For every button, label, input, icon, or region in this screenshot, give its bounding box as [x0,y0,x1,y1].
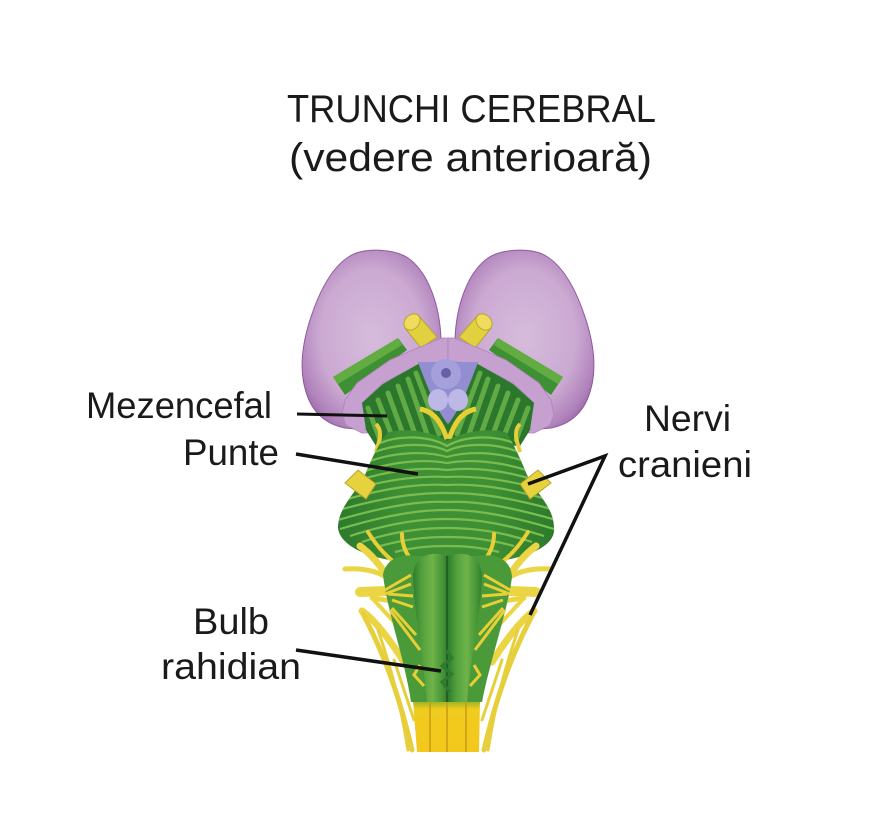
title [287,88,656,180]
midbrain (mesencephalon) [362,359,534,452]
title: TRUNCHI CEREBRAL [287,88,656,131]
thalamus lobes and optic structures [302,250,594,433]
label: Bulb rahidian [161,601,441,687]
label: Punte [183,432,418,474]
pons [338,430,556,560]
label: Mezencefal: Mezencefal [86,385,272,426]
label: Nervi cranieni: cranieni [618,444,752,485]
cranial nerves [345,470,551,750]
spinal cord [413,700,480,752]
label: Bulb rahidian: Bulb [193,601,269,642]
illustration: brainstem anterior view [302,250,594,752]
label: Bulb rahidian: rahidian [161,646,301,687]
label: Punte: Punte [183,432,279,473]
label: Nervi cranieni [528,398,752,615]
medulla oblongata [383,554,512,752]
label: Nervi cranieni: Nervi [644,398,731,439]
title: (vedere anterioară) [289,136,652,180]
